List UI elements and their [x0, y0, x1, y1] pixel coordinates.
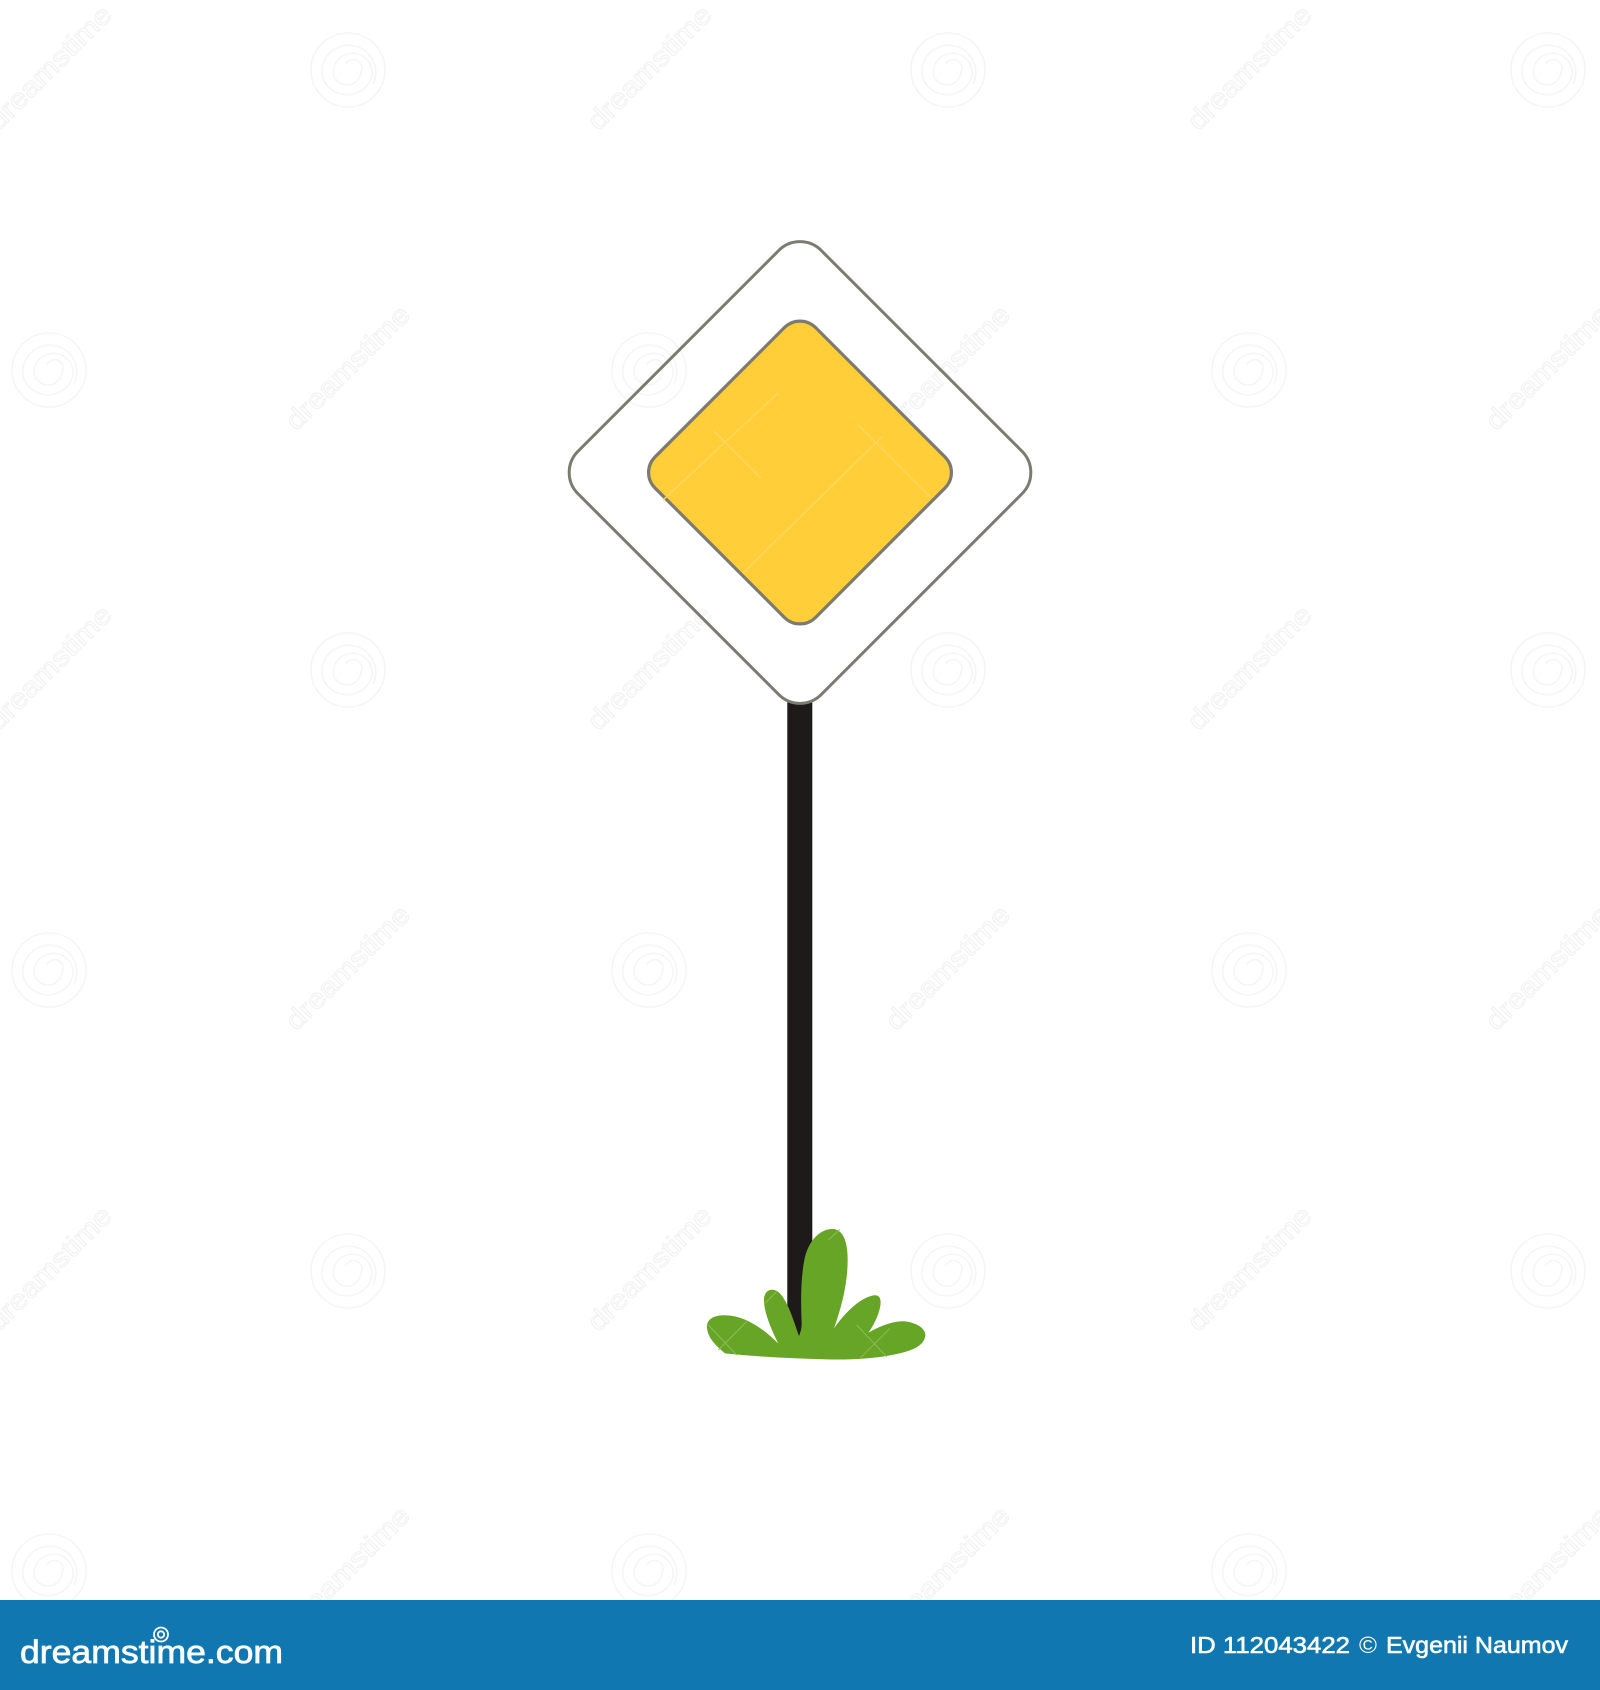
watermark: diagonal site name: dreamstime [1479, 1500, 1600, 1637]
signpost pole [787, 702, 812, 1338]
watermark: diagonal site name: dreamstime [581, 599, 718, 736]
watermark: diagonal site name: dreamstime [879, 299, 1016, 436]
watermark: diagonal site name: dreamstime [1181, 0, 1318, 136]
watermark: diagonal site name: dreamstime [1479, 299, 1600, 436]
footer logo: site name: dreamstime.com [20, 1634, 283, 1670]
watermark: diagonal site name: dreamstime [279, 899, 416, 1036]
watermark: diagonal site name: dreamstime [581, 1200, 718, 1337]
watermark lines on grass [708, 1229, 890, 1358]
watermark: diagonal site name: dreamstime [1181, 599, 1318, 736]
watermark: diagonal site name: dreamstime [879, 899, 1016, 1036]
watermark: diagonal site name: dreamstime [879, 1500, 1016, 1637]
footer bar [0, 1600, 1600, 1690]
road sign: priority road diamond [557, 229, 1043, 716]
watermark: diagonal site name: dreamstime [279, 1500, 416, 1637]
watermark: diagonal site name: dreamstime [1181, 1200, 1318, 1337]
footer logo: swirl [154, 1628, 168, 1642]
credit: author name: Evgenii Naumov [1386, 1632, 1568, 1658]
sign inner yellow diamond [639, 312, 961, 633]
watermark lines on yellow [663, 393, 930, 573]
footer credit [1190, 1632, 1568, 1658]
watermark: diagonal site name: dreamstime [1479, 899, 1600, 1036]
watermark: diagonal site name: dreamstime [279, 299, 416, 436]
sign outer white diamond [557, 229, 1043, 716]
credit: image id: ID 112043422 [1190, 1632, 1350, 1658]
credit: copyright symbol: © [1359, 1632, 1377, 1658]
watermark: diagonal site name: dreamstime [581, 0, 718, 136]
grass tuft [707, 1229, 925, 1359]
